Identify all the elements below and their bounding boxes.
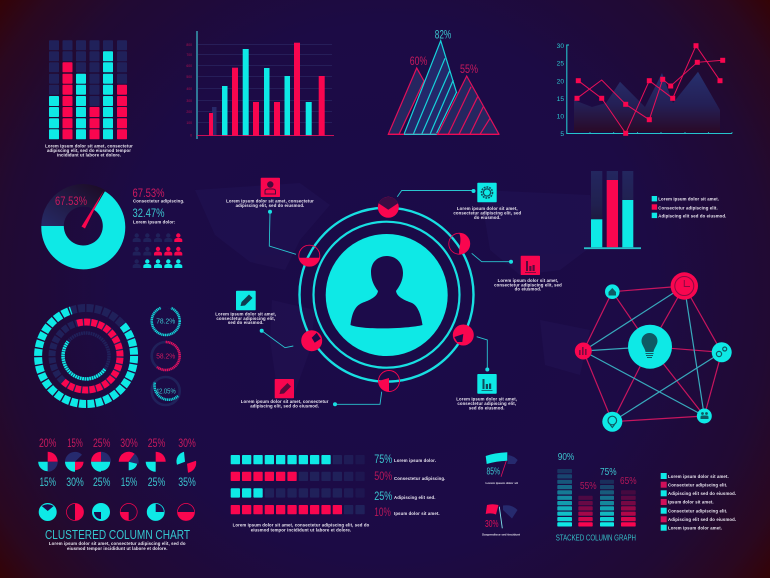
row labels xyxy=(374,452,393,519)
row labels: 50% xyxy=(374,469,393,483)
column 75% xyxy=(600,480,614,526)
row labels: 25% xyxy=(374,489,393,503)
legend: stacked column graph: Adipiscing elit sed do eiusmod. xyxy=(668,491,736,496)
pie 3 xyxy=(91,452,111,472)
row labels: 75% xyxy=(374,452,393,466)
text: bottom node: Lorem ipsum dolor sit amet, consectetur xyxy=(241,399,329,404)
gauge: 85%: Lorem ipsum dolor sit xyxy=(485,481,518,485)
ring 3 xyxy=(92,503,110,521)
axis labels: 30 xyxy=(557,43,564,50)
panel: line chart xyxy=(557,43,732,138)
panel: vertical bar chart xyxy=(186,31,334,139)
text: clustered chart caption: eiusmod tempor incididunt ut labore et dolore. xyxy=(67,546,168,551)
pie 6 xyxy=(176,452,196,473)
axis labels: 0 xyxy=(190,134,192,138)
panel: stacked column graph xyxy=(557,451,637,526)
axis labels: 15 xyxy=(557,96,564,103)
axis labels: 10 xyxy=(557,114,564,121)
text: left node: Lorem ipsum dolor sit amet, xyxy=(215,312,276,316)
ring 2 xyxy=(66,504,84,520)
labels: 55% xyxy=(580,480,597,492)
panel: block column chart xyxy=(45,40,133,158)
icon: user tile xyxy=(261,178,280,197)
markers xyxy=(574,43,725,136)
axis labels xyxy=(186,43,192,138)
text: lower right node: consectetur adipiscing elit, xyxy=(457,401,516,406)
top percentages: 30% xyxy=(120,436,138,450)
legend: three bar chart xyxy=(652,196,726,218)
axis labels: 200 xyxy=(186,110,192,114)
text: left node: sed do eiusmod. xyxy=(228,320,264,325)
panel: donut legend: Consectetur adipiscing. xyxy=(133,198,184,204)
axis labels: 300 xyxy=(186,99,192,103)
ring 5 xyxy=(147,504,164,520)
axis labels: 25 xyxy=(557,60,564,68)
gauge: 42.05%: 42.05% xyxy=(156,386,176,396)
text: left node: consectetur adipiscing elit, xyxy=(216,316,275,321)
legend: three bar chart: Consectetur adipiscing elit. xyxy=(658,205,718,210)
axes xyxy=(567,45,732,134)
top percentages xyxy=(39,436,196,450)
panel: pie charts row xyxy=(38,436,196,489)
icon: red pencil tile xyxy=(275,379,294,398)
gauge: 30% xyxy=(482,504,520,536)
panel: horizontal progress bars: Consectetur adipiscing. xyxy=(394,476,445,481)
icon: person silhouette xyxy=(350,256,422,328)
icon: gear tile xyxy=(477,183,497,202)
axis labels: 20 xyxy=(557,78,564,85)
row 25% xyxy=(231,488,365,498)
ring 6 xyxy=(178,504,194,520)
central disc xyxy=(326,234,448,356)
legend: stacked column graph: Lorem ipsum dolor sit amet. xyxy=(668,474,729,479)
pie 1 xyxy=(38,452,58,472)
row 10% xyxy=(231,505,365,514)
panel: donut legend xyxy=(132,186,184,224)
axes xyxy=(196,31,198,139)
bars xyxy=(212,107,216,135)
gauge: 78.2% xyxy=(152,307,180,335)
red columns xyxy=(62,62,127,139)
bottom percentages: 25% xyxy=(148,475,165,489)
panel: horizontal progress bars xyxy=(231,452,445,532)
labels: 90% xyxy=(558,451,574,463)
node: team xyxy=(697,408,712,424)
icon grid: people xyxy=(133,233,182,268)
line series xyxy=(578,46,720,133)
connector: upper left xyxy=(268,210,296,254)
heading: stacked column graph: STACKED COLUMN GRAPH xyxy=(556,533,636,543)
row 50% xyxy=(231,472,365,481)
text: upper left node: Lorem ipsum dolor sit amet, consectetur xyxy=(226,198,314,204)
icon: cyan pencil tile xyxy=(236,291,256,310)
axis labels xyxy=(557,43,564,138)
node: bottom xyxy=(378,370,400,392)
ring 4 xyxy=(120,504,137,520)
text: top right node: do eiusmod. xyxy=(474,215,501,220)
axis labels: 700 xyxy=(186,53,192,57)
ring 1 xyxy=(39,503,57,521)
text: right node: Lorem ipsum dolor sit amet, xyxy=(498,278,558,283)
legend: stacked column graph: Consectetur adipiscing elit. xyxy=(668,482,727,487)
node: home xyxy=(605,284,620,299)
row labels: 10% xyxy=(374,505,391,519)
labels: 75% xyxy=(600,466,617,478)
text: top right node: consectetur adipiscing elit, sed xyxy=(453,210,521,216)
node: clock xyxy=(671,272,698,300)
bottom percentages xyxy=(39,475,196,489)
gauge: 42.05% xyxy=(152,377,180,405)
gauge: 58.2%: 58.2% xyxy=(156,352,175,360)
node: upper right xyxy=(449,233,470,254)
caption: eiusmod tempor incididunt ut labore et dolore. xyxy=(251,528,351,532)
connector: top right xyxy=(397,189,476,197)
gauge: 85%: 85% xyxy=(487,466,500,478)
bottom percentages: 15% xyxy=(121,475,137,489)
gauge: 30%: Suspendisse sed tincidunt xyxy=(482,532,520,536)
cyan columns xyxy=(49,51,113,139)
text: right node: do eiusmod. xyxy=(515,287,541,292)
labels: 55% xyxy=(460,62,478,76)
gauge: 58.2% xyxy=(152,342,180,370)
node: gears xyxy=(712,342,732,362)
labels xyxy=(558,451,637,492)
node: bars xyxy=(575,342,592,360)
heading: clustered column chart: CLUSTERED COLUMN CHART xyxy=(45,527,190,542)
caption: adipiscing elit, sed do eiusmod tempor xyxy=(47,148,131,153)
gauge: 85% xyxy=(485,452,518,485)
caption: Lorem ipsum dolor sit amet, consectetur xyxy=(45,143,133,148)
needle xyxy=(82,191,104,228)
donut label: 67.53% xyxy=(55,194,87,208)
panel: network diagram xyxy=(575,272,732,432)
text: lower right node: sed do eiusmod. xyxy=(469,406,505,410)
legend: stacked column graph: Adipiscing elit sed do eiusmod. xyxy=(668,517,736,522)
connector: bottom xyxy=(333,392,382,406)
caption: Lorem ipsum dolor sit amet, consectetur adipiscing elit, sed do xyxy=(233,523,370,528)
bottom percentages: 25% xyxy=(93,475,111,489)
panel: horizontal progress bars: Ipsum dolor sit amet. xyxy=(394,511,440,516)
row 75% xyxy=(231,455,365,464)
text: right node: consectetur adipiscing elit, sed xyxy=(494,282,562,288)
panel: triangle chart xyxy=(388,28,500,134)
column 55% xyxy=(578,496,593,526)
labels: 60% xyxy=(410,54,427,68)
text: top right node: Lorem ipsum dolor sit amet, xyxy=(457,206,518,211)
column 65% xyxy=(621,490,636,526)
node: bulb xyxy=(628,325,672,369)
legend: three bar chart: Adipiscing elit sed do eiusmod. xyxy=(658,213,726,218)
connector: lower left xyxy=(260,329,293,348)
panel: donut legend: 67.53% xyxy=(132,186,165,200)
axis labels: 500 xyxy=(186,75,192,79)
central hub xyxy=(300,208,474,382)
axis labels: 5 xyxy=(560,131,564,138)
triangle 60% xyxy=(388,68,424,134)
faint world map xyxy=(195,183,600,400)
text: upper left node: adipiscing elit, sed do eiusmod. xyxy=(236,203,304,208)
triangle 55% xyxy=(438,76,499,134)
top percentages: 15% xyxy=(67,436,83,450)
bottom percentages: 35% xyxy=(178,475,196,489)
top percentages: 25% xyxy=(148,436,165,450)
pie 4 xyxy=(119,452,139,470)
panel: ring icons row xyxy=(39,503,195,521)
labels xyxy=(410,28,478,76)
area shapes xyxy=(574,72,720,132)
panel: horizontal progress bars: Lorem ipsum dolor. xyxy=(394,458,436,463)
empty cells xyxy=(49,40,127,106)
axis labels: 800 xyxy=(186,43,192,47)
caption: incididunt ut labore et dolore. xyxy=(57,153,121,158)
pie 5 xyxy=(146,452,166,472)
rings xyxy=(300,208,474,382)
triangle 82% xyxy=(404,41,457,134)
axis labels: 600 xyxy=(186,64,192,68)
panel: three bar chart xyxy=(584,171,641,249)
gauge: 78.2%: 78.2% xyxy=(156,316,175,326)
legend: stacked column graph: Ipsum dolor sit amet. xyxy=(668,500,714,504)
legend: three bar chart: Lorem ipsum dolor sit amet. xyxy=(658,197,719,202)
text: lower right node: Lorem ipsum dolor sit amet, xyxy=(456,396,517,402)
legend: stacked column graph: Lorem ipsum dolor amet. xyxy=(668,525,722,530)
top percentages: 25% xyxy=(93,436,111,450)
axis labels: 100 xyxy=(186,121,192,125)
axis labels: 400 xyxy=(186,87,192,91)
labels: 65% xyxy=(620,475,637,487)
legend: stacked column graph: Consectetur adipiscing elit. xyxy=(668,508,727,513)
pie 2 xyxy=(65,452,84,472)
connector: right xyxy=(472,253,513,264)
connector: lower right xyxy=(477,337,489,372)
labels: 82% xyxy=(435,28,451,42)
node: upper left xyxy=(299,245,320,266)
node: lower right xyxy=(453,324,474,346)
pink links xyxy=(583,286,722,422)
bottom percentages: 15% xyxy=(39,475,56,489)
text: bottom node: adipiscing elit, sed do eiusmod. xyxy=(250,404,319,408)
text: clustered chart caption: Lorem ipsum dolor sit amet, consectetur adipiscing elit, sed do xyxy=(49,541,186,546)
top percentages: 30% xyxy=(178,436,196,450)
panel: horizontal progress bars: Adipiscing elit sed. xyxy=(394,495,436,500)
bottom percentages: 30% xyxy=(66,475,84,489)
icon: cyan bars tile xyxy=(477,374,497,394)
top percentages: 20% xyxy=(39,436,57,450)
panel: donut chart xyxy=(41,184,125,269)
panel: donut legend: 32.47% xyxy=(132,206,165,220)
panel: donut legend: Lorem ipsum dolor: xyxy=(133,220,176,224)
node: lower left xyxy=(301,330,322,351)
node: pin xyxy=(602,412,622,432)
cyan links xyxy=(583,286,722,422)
gauge: 30%: 30% xyxy=(485,519,499,530)
column 90% xyxy=(557,469,572,526)
legend: stacked column graph xyxy=(661,473,736,531)
chart: concentric segmented rings xyxy=(38,308,134,404)
node: top xyxy=(378,197,399,218)
icon: red bars tile xyxy=(521,256,540,275)
